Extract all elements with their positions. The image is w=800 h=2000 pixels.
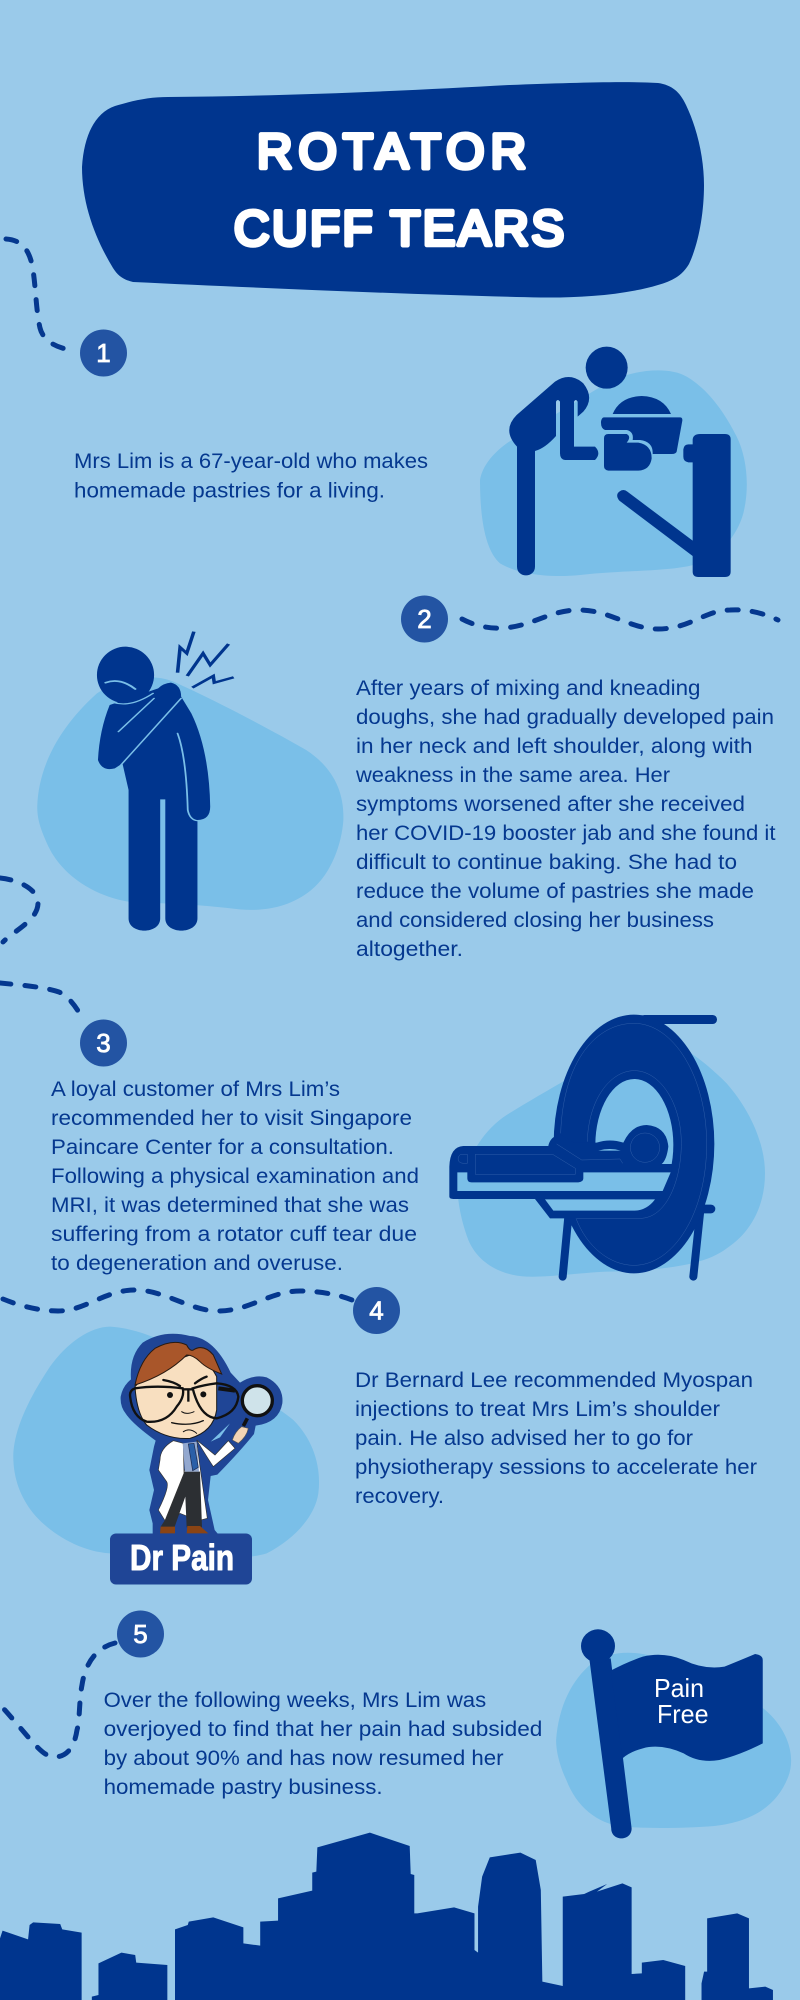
step 2 text: symptoms worsened after she received [356,793,745,816]
step 4 text: Dr Bernard Lee recommended Myospan [355,1369,753,1392]
step 1 badge [80,330,127,376]
step 3 text: A loyal customer of Mrs Lim’s [51,1078,340,1101]
blob behind mascot [13,1327,319,1559]
step 3 text [51,1078,419,1275]
mascot glasses [130,1383,238,1422]
scanner base [535,1199,670,1218]
blob behind figure [37,677,343,910]
step 4 badge [353,1287,400,1334]
mascot tie [188,1443,198,1471]
mascot face [135,1355,217,1438]
mascot eyes [167,1391,206,1398]
Dr Pain label: Dr Pain [130,1537,234,1578]
mixing bowl [601,396,682,454]
open space under table [545,1199,655,1211]
table bed and patient silhouette [449,1125,672,1199]
mascot brows and mouth [163,1377,207,1433]
title banner [82,82,704,298]
city skyline silhouette [0,1833,773,2000]
title text: ROTATOR [257,125,526,179]
step 2 text: After years of mixing and kneading [356,677,700,700]
flag text [654,1673,708,1729]
dashed path to step 4 [3,1290,352,1311]
step 5 badge: 5 [133,1619,148,1649]
dashed path from step 5 [3,1643,115,1757]
mascot hand [232,1427,248,1443]
baker head [586,347,628,389]
step 2 text: her COVID-19 booster jab and she found it [356,822,776,845]
step 1 text: homemade pastries for a living. [74,480,385,502]
step 4 text: recovery. [355,1485,444,1508]
blob behind scanner [458,1037,765,1277]
illustration: person kneading dough [480,347,747,577]
scanner bore [595,1079,673,1211]
dashed path to step 3 [0,983,82,1018]
mascot sleeve [197,1440,235,1467]
pain lightning bolts [178,632,234,688]
step 2 text: weakness in the same area. Her [355,764,670,787]
mascot coat [158,1441,184,1521]
dashed path loop at left edge [0,878,38,942]
step 3 badge [80,1020,127,1066]
coat back and right flap [173,1442,207,1521]
step 1 badge: 1 [96,338,111,368]
illustration: Dr Pain mascot [13,1327,319,1559]
illustration: person with shoulder pain [37,632,343,931]
gap above patient chest [598,1149,621,1151]
step 2 text [355,677,776,961]
scanner ring [554,1015,714,1273]
magnifying glass [242,1386,272,1426]
mascot shoes [160,1526,208,1533]
table [617,434,731,577]
figure head [97,647,154,703]
step 3 text: suffering from a rotator cuff tear due [51,1223,417,1246]
gap between arm and head [211,1423,230,1442]
step 2 text: altogether. [356,938,463,961]
mascot sticker outline [121,1334,282,1534]
step 4 text [355,1369,757,1508]
flag pole [589,1658,632,1838]
flag cloth [611,1654,763,1761]
title text [234,125,564,256]
step 4 text: injections to treat Mrs Lim’s shoulder [355,1398,720,1421]
step 1 text [74,450,428,502]
step 2 text: in her neck and left shoulder, along with [356,735,752,758]
step 5 text: homemade pastry business. [104,1776,383,1799]
illustration: MRI scanner [449,1015,765,1277]
dashed path to step 1 [6,239,72,350]
figure body [98,683,210,931]
step 3 text: Paincare Center for a consultation. [51,1136,394,1159]
step 5 text: Over the following weeks, Mrs Lim was [104,1689,486,1712]
flag text: Pain [654,1673,704,1703]
step 2 text: doughs, she had gradually developed pain [356,706,774,729]
scanner top and side bars [640,1015,717,1213]
scanner and patient detail lines [458,1023,707,1265]
step 1 text: Mrs Lim is a 67-year-old who makes [74,450,428,473]
step 4 text: pain. He also advised her to go for [355,1427,693,1450]
step 3 text: Following a physical examination and [51,1165,419,1188]
illustration: pain free flag [556,1629,791,1838]
step 5 badge [117,1610,164,1658]
flag text: Free [657,1699,708,1729]
step 5 text: overjoyed to find that her pain had subsided [104,1718,542,1741]
dashed path from step 2 [462,610,778,629]
baker body [509,377,598,575]
mascot hair [135,1342,222,1385]
step 4 text: physiotherapy sessions to accelerate her [355,1456,757,1479]
step 5 text: by about 90% and has now resumed her [104,1747,504,1770]
scanner legs [563,1213,700,1277]
figure outlines [105,681,197,821]
mascot trousers [161,1472,202,1529]
step 3 text: MRI, it was determined that she was [51,1194,409,1217]
title text: CUFF TEARS [234,202,564,256]
blob behind baker [480,370,747,576]
step 2 badge: 2 [417,604,432,634]
step 2 text: and considered closing her business [356,909,714,932]
step 3 text: to degeneration and overuse. [51,1252,343,1275]
step 4 badge: 4 [369,1296,384,1326]
step 2 text: difficult to continue baking. She had to [356,851,737,874]
step 3 badge: 3 [96,1028,111,1058]
step 2 text: reduce the volume of pastries she made [356,880,754,903]
step 5 text [104,1689,542,1799]
step 2 badge [401,596,448,642]
open space under bed [457,1172,671,1191]
step 3 text: recommended her to visit Singapore [51,1107,412,1130]
flag pole knob [581,1629,615,1663]
title blob [82,82,704,298]
baker hands [604,434,652,471]
blob behind flag [556,1653,791,1828]
Dr Pain label [110,1534,252,1584]
mascot shirt [183,1442,199,1472]
